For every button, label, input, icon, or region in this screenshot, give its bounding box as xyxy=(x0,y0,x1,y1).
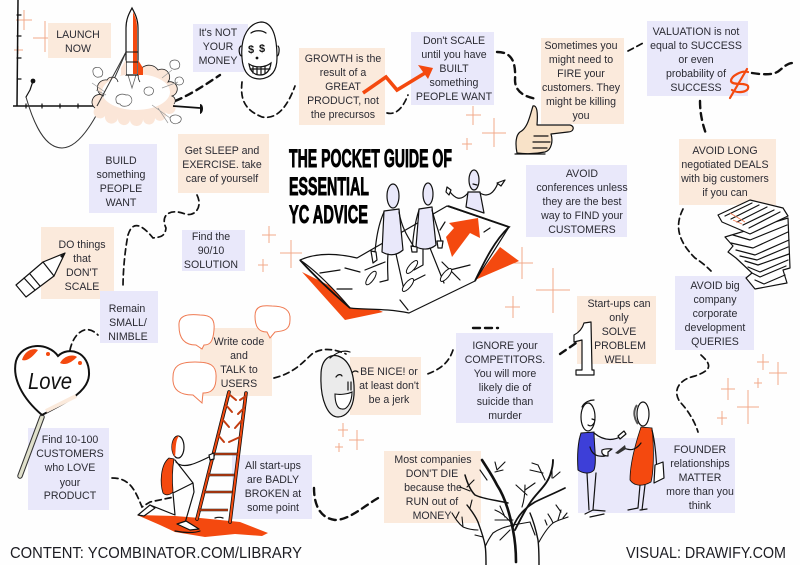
box: find customers: Find 10-100 xyxy=(42,434,98,446)
box: do things: that xyxy=(73,253,91,265)
box: valuation: probability of xyxy=(666,68,726,80)
box: avoid conferences: CUSTOMERS xyxy=(548,224,616,236)
box: ignore competitors: murder xyxy=(488,410,522,422)
box: find customers xyxy=(28,428,109,510)
box: growth: PRODUCT, not xyxy=(307,95,379,107)
box: fire your customers: you xyxy=(572,110,590,122)
box: build something: WANT xyxy=(106,197,137,209)
box: founder relationships xyxy=(578,438,735,513)
title xyxy=(289,145,452,229)
box: most companies: because the xyxy=(404,482,462,494)
box: find customers: CUSTOMERS xyxy=(36,448,104,460)
box: sleep and exercise: EXERCISE. take xyxy=(182,159,262,171)
icon: bald face with dollar eyes xyxy=(239,22,279,79)
box: solve one problem: SOLVE xyxy=(602,326,636,338)
box: write code xyxy=(200,328,272,396)
box: valuation: SUCCESS xyxy=(670,82,722,94)
box: avoid big company xyxy=(675,276,754,350)
box: solve one problem: Start-ups can xyxy=(587,298,651,310)
icon: love lollipop: Love xyxy=(28,368,72,394)
icon: bald face with dollar eyes: $ xyxy=(259,43,265,55)
box: do things: DON'T xyxy=(66,267,99,279)
box: do things: DO things xyxy=(58,239,106,251)
box: solve one problem: WELL xyxy=(605,354,634,366)
box: remain small xyxy=(100,291,158,343)
box: build something xyxy=(89,144,157,213)
box: ignore competitors: likely die of xyxy=(479,382,531,394)
box: write code: Write code xyxy=(214,336,264,348)
box: valuation: VALUATION is not xyxy=(653,26,739,38)
box: it's not your money: YOUR xyxy=(203,41,234,53)
credit: content: CONTENT: YCOMBINATOR.COM/LIBRARY xyxy=(10,545,302,562)
icon: stack of papers xyxy=(718,200,790,289)
box: badly broken: All start-ups xyxy=(245,460,301,472)
box: fire your customers: customers. They xyxy=(542,82,621,94)
box: build something: PEOPLE xyxy=(100,183,142,195)
box: find customers: PRODUCT xyxy=(44,490,97,502)
box: don't scale: Don't SCALE xyxy=(423,35,485,47)
illustration: map and walking people xyxy=(300,170,519,320)
box: avoid big company: QUERIES xyxy=(691,336,739,348)
box: growth: the precursos xyxy=(311,109,375,121)
box: write code: and xyxy=(230,350,248,362)
box: most companies: RUN out of xyxy=(406,496,458,508)
title: THE POCKET GUIDE OF xyxy=(289,145,452,173)
icon: number one xyxy=(574,322,594,375)
box: 90/10 solution: 90/10 xyxy=(198,245,224,257)
box: growth: result of a xyxy=(320,67,366,79)
icon: love lollipop xyxy=(15,346,89,476)
box: solve one problem xyxy=(577,296,656,366)
box: most companies: DON'T DIE xyxy=(406,468,458,480)
box: remain small: Remain xyxy=(109,303,145,315)
box: write code: USERS xyxy=(221,378,257,390)
box: avoid conferences: AVOID xyxy=(566,168,598,180)
box: sleep and exercise xyxy=(178,134,269,193)
figures: founders talking xyxy=(578,400,664,517)
box: avoid big company: corporate xyxy=(693,308,737,320)
title: ESSENTIAL xyxy=(289,173,369,201)
box: badly broken xyxy=(232,455,312,519)
box: ignore competitors xyxy=(456,333,553,423)
box: be nice: be a jerk xyxy=(369,394,410,406)
icon: pencil xyxy=(16,253,65,297)
box: it's not your money: It's NOT xyxy=(199,27,238,39)
box: most companies: MONEY xyxy=(413,510,451,522)
icon: broken ladder xyxy=(197,392,246,522)
box: don't scale xyxy=(411,32,494,105)
box: launch now: LAUNCH xyxy=(56,29,100,41)
box: founder relationships: MATTER xyxy=(679,472,722,484)
box: write code: TALK to xyxy=(220,364,258,376)
box: fire your customers xyxy=(541,38,624,124)
box: founder relationships: think xyxy=(689,500,712,512)
box: badly broken: some point xyxy=(247,502,299,514)
box: ignore competitors: COMPETITORS. xyxy=(465,354,545,366)
box: don't scale: something xyxy=(430,77,479,89)
icon: orange growth arrow xyxy=(363,65,433,93)
icon: rocket launch xyxy=(92,8,203,126)
box: don't scale: PEOPLE WANT xyxy=(416,91,493,103)
box: avoid long deals: negotiated DEALS xyxy=(681,159,769,171)
box: build something: something xyxy=(97,169,146,181)
box: avoid big company: AVOID big xyxy=(690,280,740,292)
icon: pointing hand xyxy=(515,106,573,154)
box: be nice xyxy=(350,357,421,415)
orange puddle xyxy=(137,515,268,537)
box: avoid big company: development xyxy=(685,322,745,334)
box: build something: BUILD xyxy=(105,155,137,167)
box: find customers: your xyxy=(60,477,81,489)
box: avoid conferences: conferences unless xyxy=(536,182,628,194)
box: avoid long deals: with big customers xyxy=(680,173,769,185)
box: ignore competitors: You will more xyxy=(474,368,536,380)
box: 90/10 solution: Find the xyxy=(192,231,230,243)
box: avoid long deals: AVOID LONG xyxy=(692,145,758,157)
box: valuation: or even xyxy=(678,54,714,66)
box: launch now: NOW xyxy=(65,43,91,55)
box: be nice: BE NICE! or xyxy=(360,366,418,378)
box: avoid conferences xyxy=(526,165,628,237)
box: don't scale: until you have xyxy=(421,49,487,61)
box: valuation: equal to SUCCESS xyxy=(650,40,742,52)
box: founder relationships: FOUNDER xyxy=(674,444,727,456)
box: sleep and exercise: care of yourself xyxy=(186,173,258,185)
speech bubbles xyxy=(173,306,290,403)
box: most companies: Most companies xyxy=(394,454,472,466)
title: YC ADVICE xyxy=(289,201,368,229)
box: do things: SCALE xyxy=(65,281,99,293)
box: solve one problem: PROBLEM xyxy=(594,340,646,352)
box: remain small: SMALL/ xyxy=(109,317,147,329)
box: remain small: NIMBLE xyxy=(108,331,148,343)
icon: bare trees xyxy=(452,460,568,565)
box: growth: GREAT xyxy=(325,81,361,93)
box: ignore competitors: IGNORE your xyxy=(472,340,538,352)
box: founder relationships: relationships xyxy=(670,458,730,470)
box: it's not your money xyxy=(193,24,248,72)
box: avoid long deals xyxy=(679,139,776,205)
dashed connectors xyxy=(70,42,793,520)
box: be nice: at least don't xyxy=(359,380,419,392)
chart axes and J curve xyxy=(13,0,126,148)
box: founder relationships: more than you xyxy=(666,486,734,498)
credit: visual: VISUAL: DRAWIFY.COM xyxy=(626,545,786,562)
icon: bald face with dollar eyes: $ xyxy=(248,44,254,56)
box: most companies xyxy=(384,451,481,523)
box: avoid big company: company xyxy=(694,294,737,306)
figure: kneeling man xyxy=(138,436,223,532)
box: don't scale: BUILT xyxy=(439,63,469,75)
box: fire your customers: might be killing xyxy=(546,96,616,108)
box: solve one problem: only xyxy=(609,312,629,324)
box: fire your customers: might need to xyxy=(549,54,613,66)
icon: smiling face xyxy=(321,351,358,417)
box: growth xyxy=(299,48,385,125)
box: it's not your money: MONEY xyxy=(199,55,237,67)
box: do things xyxy=(41,227,114,299)
box: valuation xyxy=(647,21,748,96)
box: badly broken: BROKEN at xyxy=(245,488,301,500)
icon: orange crossed dollar sign xyxy=(730,69,748,98)
box: growth: GROWTH is the xyxy=(305,53,381,65)
box: fire your customers: FIRE your xyxy=(557,68,605,80)
box: launch now xyxy=(48,23,111,58)
box: avoid conferences: way to FIND your xyxy=(540,210,623,222)
box: 90/10 solution xyxy=(182,230,245,271)
box: avoid long deals: if you can xyxy=(702,187,748,199)
box: 90/10 solution: SOLUTION xyxy=(184,259,238,271)
box: avoid conferences: they are the best xyxy=(543,196,622,208)
box: fire your customers: Sometimes you xyxy=(544,40,618,52)
box: find customers: who LOVE xyxy=(44,462,95,474)
box: sleep and exercise: Get SLEEP and xyxy=(185,145,259,157)
box: badly broken: are BADLY xyxy=(247,474,299,486)
box: ignore competitors: suicide than xyxy=(477,396,533,408)
